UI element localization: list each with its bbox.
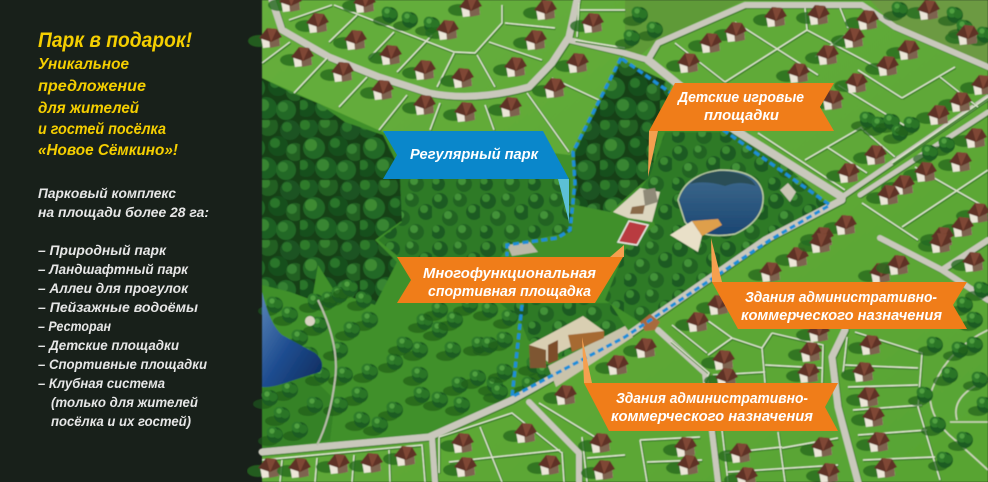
park paths bottom right bbox=[930, 330, 988, 470]
text block: park complex area: на площади более 28 га: bbox=[38, 204, 209, 220]
callout: administrative buildings bottom: Здания административно- bbox=[616, 390, 808, 407]
trees among plots bbox=[373, 2, 988, 164]
pond-side building bbox=[670, 219, 722, 252]
callout: administrative buildings right: коммерческого назначения bbox=[741, 307, 942, 324]
park land bbox=[262, 57, 830, 452]
callout: administrative buildings bottom bbox=[582, 337, 838, 431]
list: park features: – Аллеи для прогулок bbox=[38, 280, 189, 296]
left text panel bbox=[0, 0, 262, 482]
list: park features: – Детские площадки bbox=[38, 337, 179, 353]
gazebo by lake bbox=[305, 316, 315, 326]
south-west plaza bbox=[507, 242, 538, 256]
lot hedges bbox=[262, 4, 988, 482]
subheading: unique offer: предложение bbox=[38, 78, 146, 95]
pond bbox=[678, 170, 763, 236]
administrative building bbox=[529, 316, 604, 368]
subheading: unique offer: «Новое Сёмкино»! bbox=[38, 142, 179, 159]
callout: regular park bbox=[383, 131, 569, 222]
outer woodland top right bbox=[870, 0, 988, 67]
callout: children's playgrounds bbox=[648, 83, 834, 177]
list: park features: – Природный парк bbox=[38, 242, 167, 258]
houses bbox=[247, 0, 988, 482]
text block: park complex area bbox=[38, 185, 209, 220]
text block: park complex area: Парковый комплекс bbox=[38, 185, 176, 201]
aerial map of the settlement bbox=[247, 0, 988, 482]
big lake bbox=[262, 292, 322, 387]
forest strip below sports banner bbox=[500, 303, 625, 358]
park boundary dashed line lower section bbox=[512, 58, 830, 397]
white pavilion by the pond bbox=[780, 183, 796, 202]
playground plaza bbox=[613, 188, 660, 222]
forest central bbox=[378, 178, 572, 258]
callout: administrative buildings right bbox=[711, 238, 967, 329]
lot boundary lines bbox=[262, 3, 988, 482]
curved park path bbox=[317, 300, 336, 445]
callout: multifunctional sports ground: Многофункциональная bbox=[423, 265, 596, 282]
scattered meadow trees bbox=[253, 280, 553, 446]
bottom-left trees near lake bbox=[262, 375, 335, 450]
list: park features bbox=[38, 242, 207, 429]
roads bbox=[262, 0, 988, 482]
list: park features: – Ресторан bbox=[38, 318, 111, 334]
callout: regular park: Регулярный парк bbox=[410, 146, 539, 163]
list: park features: – Спортивные площадки bbox=[38, 356, 207, 372]
list: park features: посёлка и их гостей) bbox=[51, 413, 191, 429]
callout: multifunctional sports ground: спортивная площадка bbox=[428, 283, 591, 300]
sports court bbox=[618, 221, 648, 245]
forest around the pond bbox=[605, 132, 830, 322]
subheading: unique offer: и гостей посёлка bbox=[38, 121, 166, 138]
subheading: unique offer bbox=[38, 56, 179, 159]
subheading: unique offer: Уникальное bbox=[38, 56, 129, 73]
callout: multifunctional sports ground bbox=[397, 245, 624, 303]
callout: children's playgrounds: площадки bbox=[704, 107, 779, 124]
dense forest west bbox=[262, 78, 445, 305]
callout: administrative buildings right: Здания административно- bbox=[745, 289, 937, 306]
park boundary dashed line bbox=[507, 58, 621, 256]
park trees bottom right bbox=[908, 282, 988, 471]
car park bbox=[548, 326, 633, 387]
list: park features: – Ландшафтный парк bbox=[38, 261, 189, 277]
list: park features: – Клубная система bbox=[38, 375, 165, 391]
callout: children's playgrounds: Детские игровые bbox=[676, 89, 804, 106]
small building by the road bbox=[640, 314, 660, 331]
list: park features: – Пейзажные водоёмы bbox=[38, 299, 198, 315]
heading: park as a gift: Парк в подарок! bbox=[38, 29, 192, 52]
subheading: unique offer: для жителей bbox=[38, 100, 139, 117]
dense forest inside boundary bbox=[575, 60, 672, 212]
callout: administrative buildings bottom: коммерческого назначения bbox=[611, 408, 813, 425]
list: park features: (только для жителей bbox=[51, 394, 198, 410]
